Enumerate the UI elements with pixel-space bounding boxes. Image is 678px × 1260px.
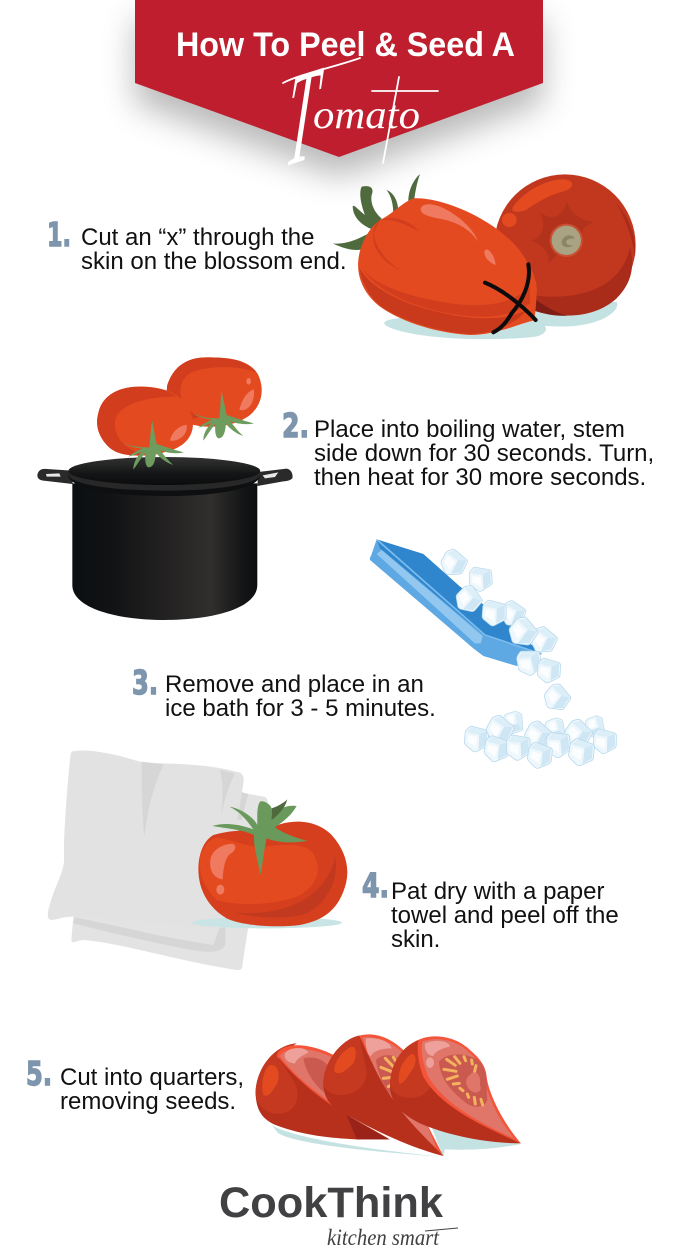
step 2 text: then heat for 30 more seconds. [314, 464, 646, 491]
banner shadow [135, 20, 543, 177]
step 2 text: Place into boiling water, stem [314, 416, 625, 443]
step 1 number: 1. [47, 215, 71, 254]
title: tomato script: omato [313, 92, 420, 137]
logo tagline: kitchen smart [327, 1225, 440, 1250]
illustration: paper towel and tomato [48, 751, 347, 970]
step 1 text: skin on the blossom end. [81, 248, 346, 275]
step 4 text: Pat dry with a paper [391, 878, 604, 905]
title: how to peel and seed a: How To Peel & Seed A [176, 26, 515, 64]
step 5 text: removing seeds. [60, 1088, 236, 1115]
step 1 text: Cut an “x” through the [81, 224, 314, 251]
step 4 text: skin. [391, 926, 440, 953]
illustration: ice tray and cubes [370, 539, 619, 769]
title banner [135, 0, 543, 197]
step 2 number: 2. [282, 406, 309, 445]
step 5 text: Cut into quarters, [60, 1064, 244, 1091]
step 5 number: 5. [26, 1054, 52, 1093]
title: tomato script: T [280, 35, 327, 197]
logo wordmark: CookThink [219, 1179, 443, 1227]
step 3 number: 3. [132, 663, 158, 702]
step 2 text: side down for 30 seconds. Turn, [314, 440, 654, 467]
step 4 text: towel and peel off the [391, 902, 619, 929]
illustration: tomato quarters [256, 1034, 521, 1157]
step 4 number: 4. [362, 866, 389, 905]
illustration: two tomatoes with x cut [333, 174, 636, 339]
illustration: pot with tomatoes [37, 357, 293, 620]
step 3 text: Remove and place in an [165, 671, 424, 698]
title: tomato script [280, 35, 438, 197]
step 3 text: ice bath for 3 - 5 minutes. [165, 695, 436, 722]
logo [219, 1179, 458, 1250]
